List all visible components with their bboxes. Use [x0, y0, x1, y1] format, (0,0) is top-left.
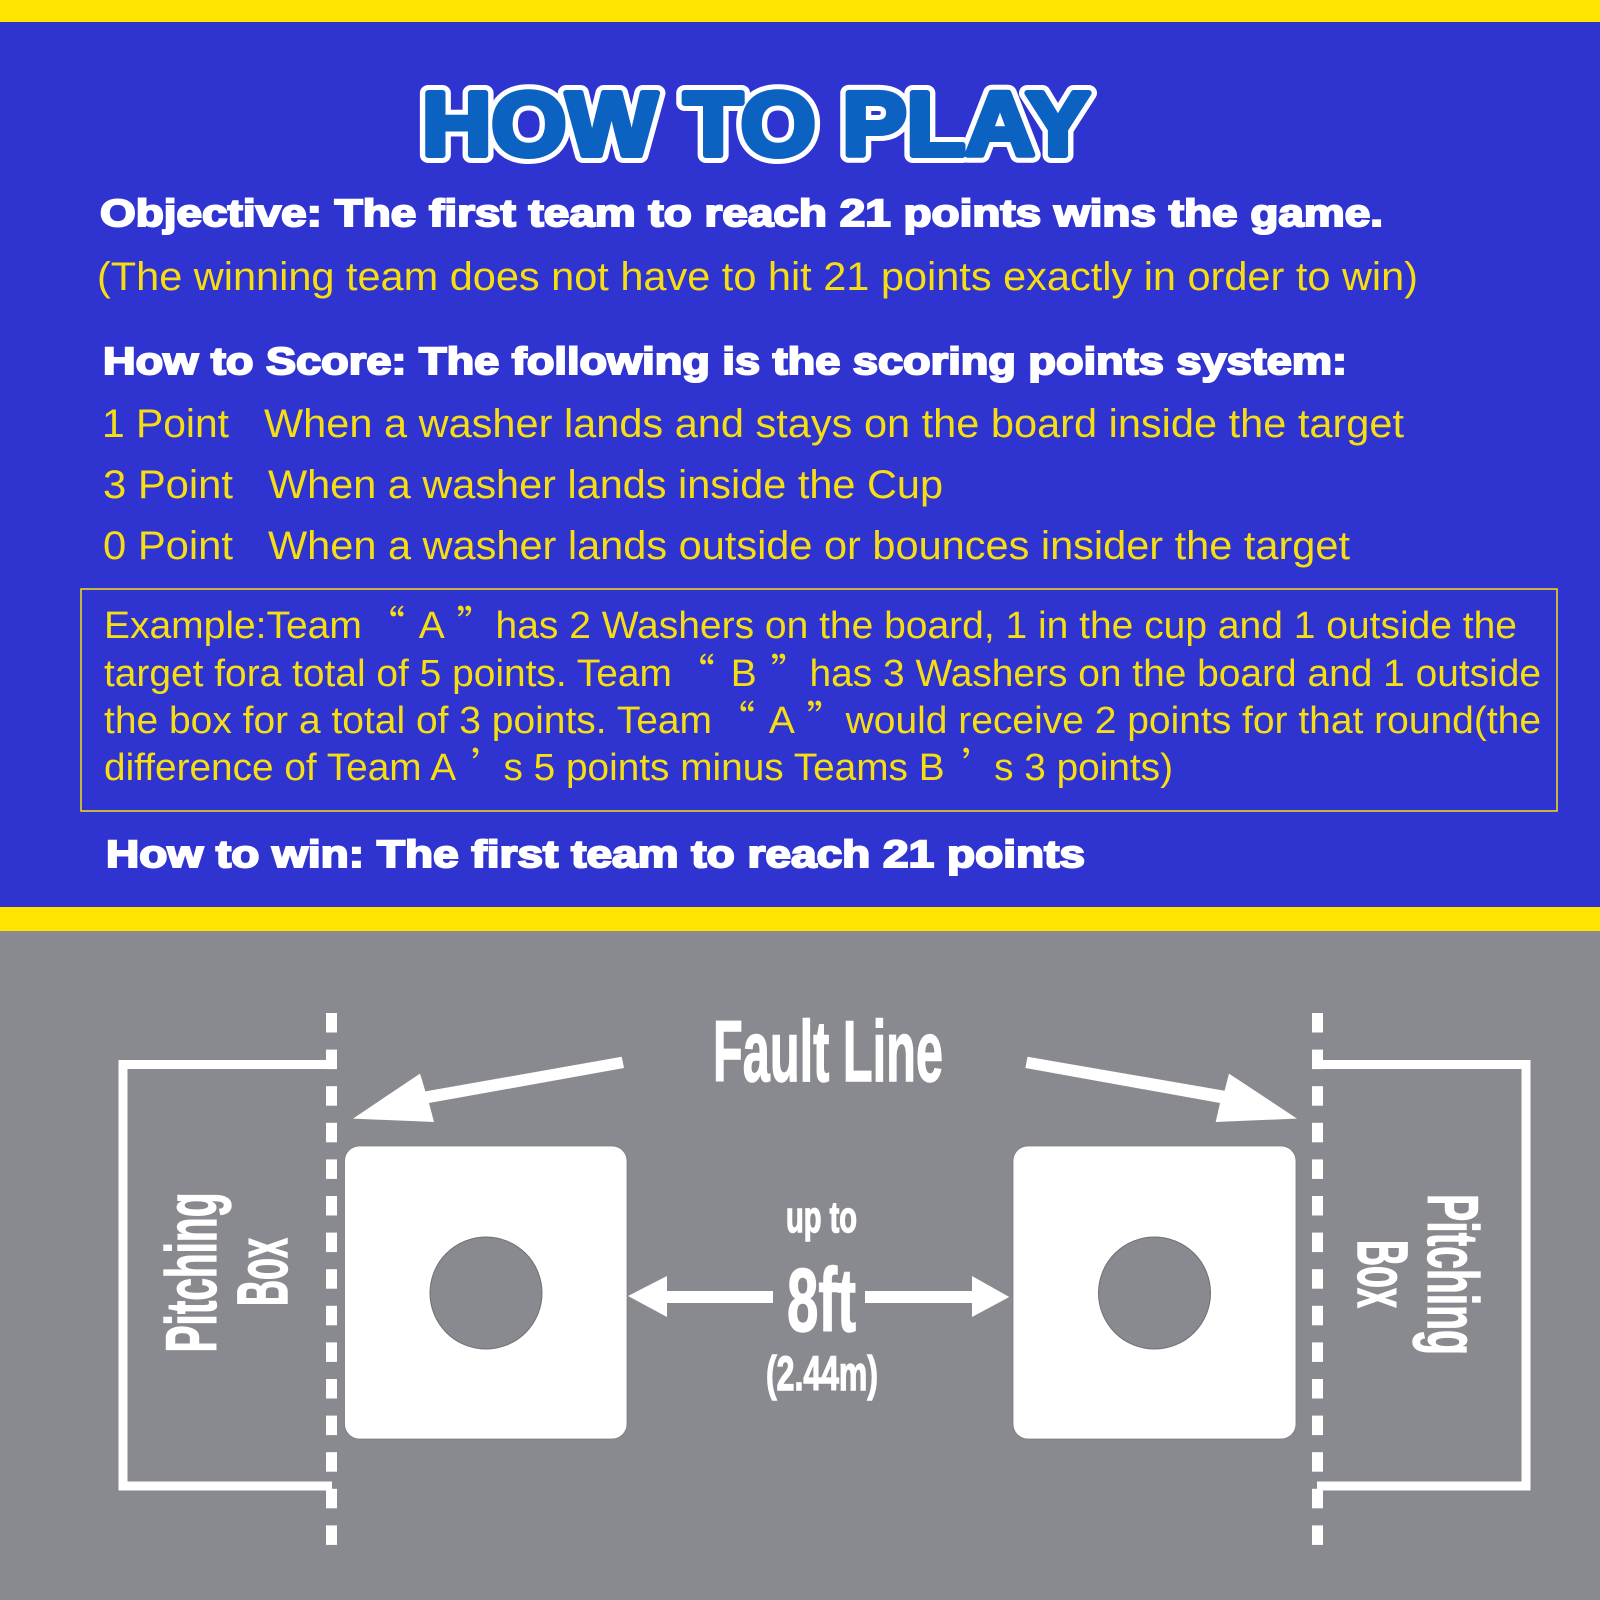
title: HOW TO PLAY — [422, 75, 1090, 175]
middle yellow band — [0, 907, 1600, 931]
scoring row: 1 point: 1 Point — [102, 402, 229, 446]
example callout: Example:Team “ A ”has 2 Washers on the board, 1 in the cup and 1 outside the — [104, 594, 1517, 649]
example callout — [81, 589, 1557, 811]
scoring row: 3 point: When a washer lands inside the Cup — [268, 463, 943, 507]
panel: court diagram background — [0, 908, 1600, 1600]
arrow: to left fault line — [353, 1057, 624, 1122]
objective note: (The winning team does not have to hit 21 points exactly in order to win) — [97, 255, 1418, 299]
left fault line — [326, 1013, 337, 1545]
distance label: up to: up to — [786, 1193, 857, 1242]
right pitching box label: Pitching — [1412, 1194, 1491, 1355]
example callout: target fora total of 5 points. Team “ B ”has 3 Washers on the board and 1 outside — [104, 642, 1541, 697]
distance label: metres: (2.44m) — [766, 1348, 878, 1401]
scoring heading: How to Score: The following is the scoring points system: — [103, 341, 1347, 383]
left pitching box label: Box — [224, 1238, 303, 1306]
how to win heading: How to win: The first team to reach 21 points — [106, 834, 1085, 876]
right pitching box label — [1342, 1194, 1491, 1355]
fault line label: Fault Line — [713, 1004, 943, 1100]
top yellow band — [0, 0, 1600, 22]
right pitching box outline — [1312, 1064, 1526, 1486]
scoring row: 0 point: 0 Point — [103, 524, 233, 568]
arrow: distance right — [865, 1276, 1009, 1317]
arrow: distance left — [628, 1276, 773, 1317]
distance label: 8ft: 8ft — [787, 1251, 856, 1351]
panel: rules background — [0, 0, 1600, 908]
scoring row: 3 point: 3 Point — [103, 463, 233, 507]
left pitching box label: Pitching — [153, 1192, 232, 1352]
left board with hole — [344, 1146, 627, 1439]
left pitching box outline — [123, 1064, 337, 1486]
example callout: difference of Team A ’s 5 points minus Teams B ’s 3 points) — [104, 736, 1173, 791]
title: HOW TO PLAY — [422, 75, 1090, 175]
scoring row: 0 point: When a washer lands outside or bounces insider the target — [268, 524, 1350, 568]
left pitching box label — [153, 1192, 303, 1352]
objective heading: Objective: The first team to reach 21 points wins the game. — [100, 193, 1383, 235]
scoring row: 1 point: When a washer lands and stays on the board inside the target — [264, 402, 1404, 446]
right board with hole — [1013, 1146, 1296, 1439]
arrow: to right fault line — [1025, 1057, 1297, 1122]
right fault line — [1312, 1013, 1323, 1545]
right pitching box label: Box — [1342, 1240, 1421, 1308]
example callout: the box for a total of 3 points. Team “ A ”would receive 2 points for that round(the — [104, 689, 1541, 744]
